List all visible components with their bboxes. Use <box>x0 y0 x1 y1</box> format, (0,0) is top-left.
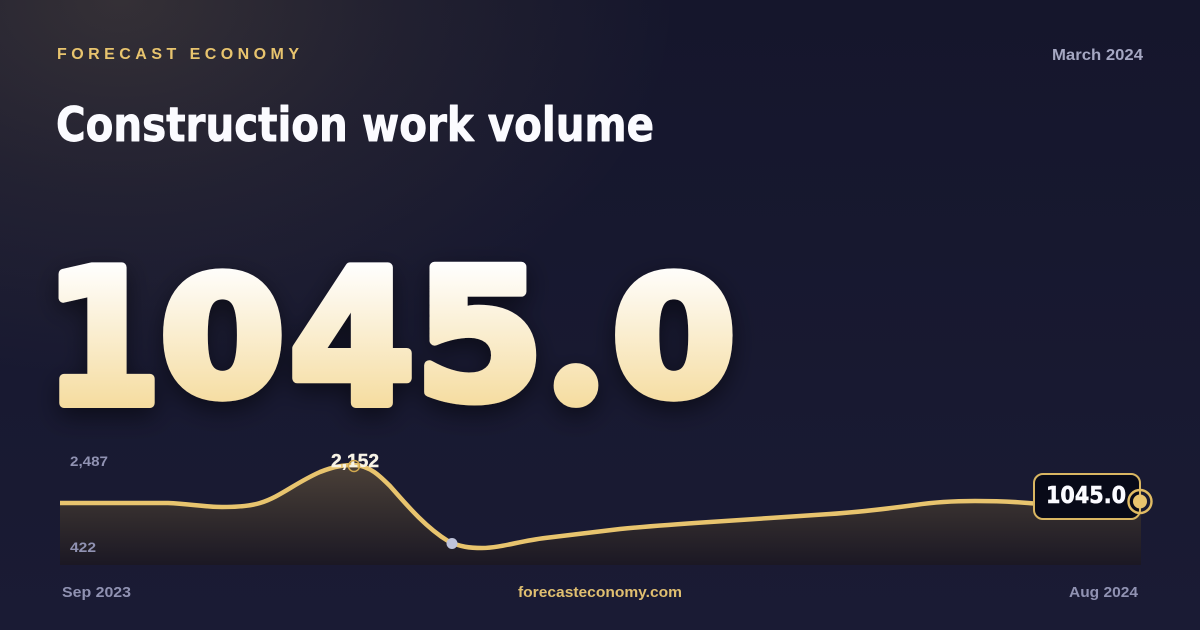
title: Construction work volume <box>56 98 654 153</box>
headline value: 4 <box>289 232 415 448</box>
axis max label: 2,487 <box>70 454 108 469</box>
headline value: 0 <box>612 244 736 434</box>
chart area fill <box>60 465 1141 565</box>
peak marker <box>348 460 360 472</box>
axis min label: 422 <box>70 540 96 555</box>
area chart <box>60 451 1152 565</box>
peak value label: 2,152 <box>331 451 379 471</box>
current value callout <box>1034 474 1140 519</box>
headline value <box>44 158 736 464</box>
start date label: Sep 2023 <box>62 584 131 601</box>
current value marker <box>1128 490 1152 513</box>
date label: March 2024 <box>1052 47 1143 64</box>
headline value: 0 <box>160 244 285 433</box>
current value callout: 1045.0 <box>1046 483 1126 509</box>
website label: forecasteconomy.com <box>518 584 682 601</box>
chart line <box>60 465 1141 548</box>
trough marker <box>446 538 458 549</box>
headline value: 1 <box>44 230 162 447</box>
headline value: 5 <box>415 232 544 441</box>
end date label: Aug 2024 <box>1069 584 1139 601</box>
headline value: . <box>542 158 610 464</box>
brand label: FORECAST ECONOMY <box>57 46 299 63</box>
